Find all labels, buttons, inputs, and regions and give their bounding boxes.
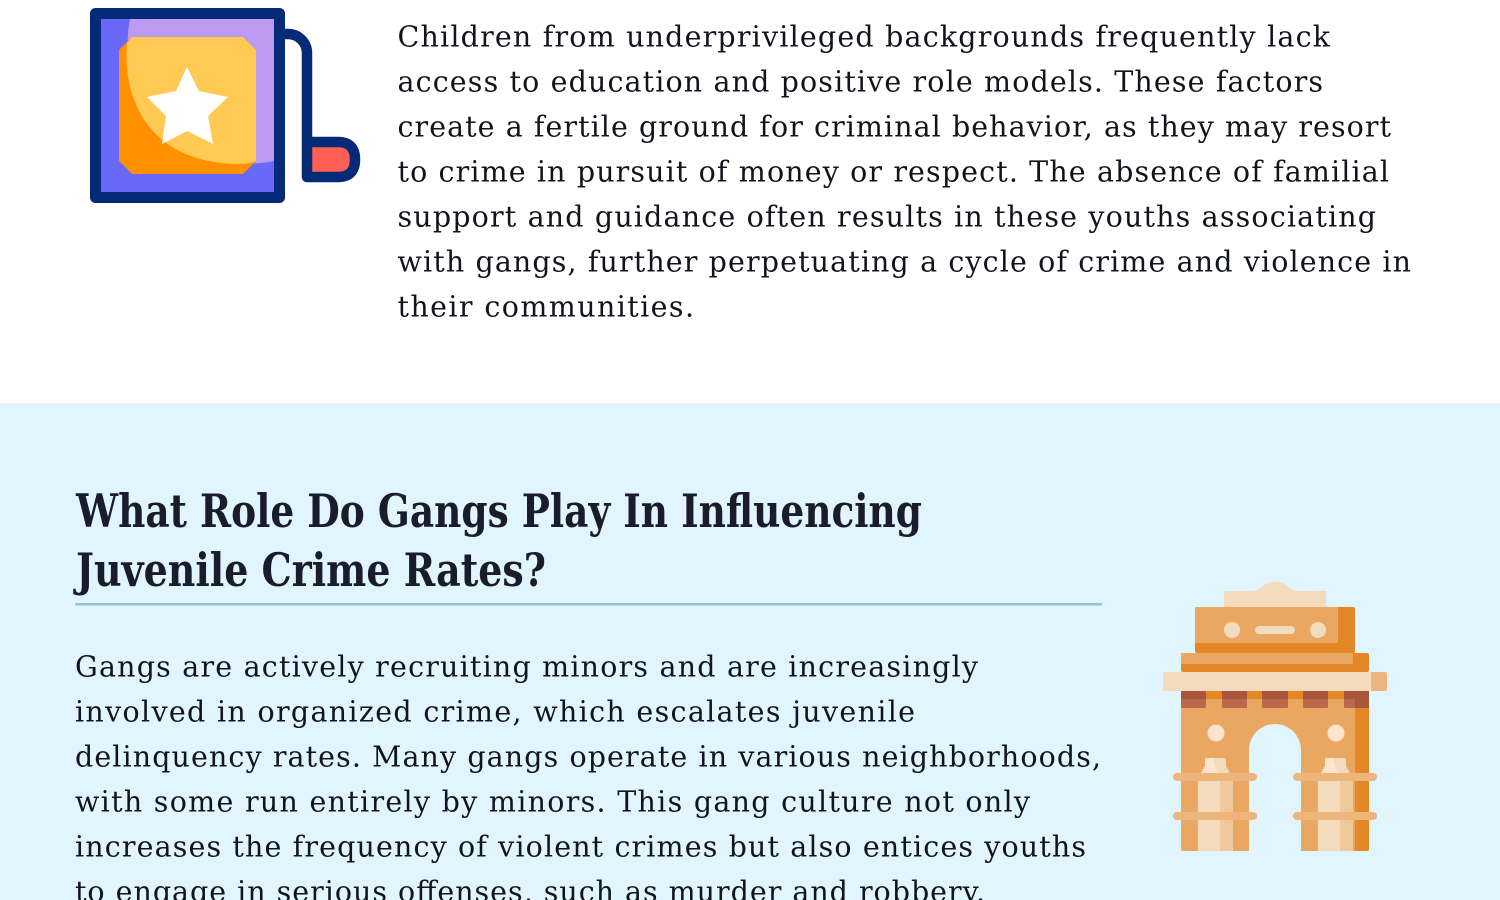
icon: India Gate monument bbox=[1163, 582, 1387, 851]
text block: underprivileged backgrounds paragraph: their communities. bbox=[398, 290, 694, 323]
panel: blue section background bbox=[0, 404, 1500, 900]
text block: gangs paragraph: delinquency rates. Many gangs operate in various neighborhoods, bbox=[75, 740, 1101, 773]
text block: underprivileged backgrounds paragraph: create a fertile ground for criminal behavior, as they may resort bbox=[398, 110, 1392, 143]
heading: gangs and juvenile crime rates: What Role Do Gangs Play In Influencing bbox=[75, 484, 922, 538]
text block: gangs paragraph: with some run entirely by minors. This gang culture not only bbox=[75, 785, 1031, 818]
text block: underprivileged backgrounds paragraph: with gangs, further perpetuating a cycle of crime and violence in bbox=[398, 245, 1411, 278]
text block: underprivileged backgrounds paragraph: to crime in pursuit of money or respect. The absence of familial bbox=[398, 155, 1389, 188]
text block: underprivileged backgrounds paragraph: access to education and positive role models. These factors bbox=[398, 65, 1323, 98]
heading: gangs and juvenile crime rates bbox=[73, 484, 922, 597]
text block: gangs paragraph: increases the frequency of violent crimes but also entices youths bbox=[75, 830, 1086, 863]
text block: underprivileged backgrounds paragraph bbox=[398, 20, 1411, 323]
text block: underprivileged backgrounds paragraph: support and guidance often results in these youths associating bbox=[398, 200, 1376, 233]
heading underline bbox=[75, 603, 1102, 606]
text block: gangs paragraph bbox=[75, 650, 1101, 900]
text block: gangs paragraph: Gangs are actively recruiting minors and are increasingly bbox=[75, 650, 979, 683]
text block: gangs paragraph: involved in organized crime, which escalates juvenile bbox=[75, 695, 915, 728]
icon: music box with star bbox=[96, 14, 355, 198]
heading: gangs and juvenile crime rates: Juvenile Crime Rates? bbox=[73, 543, 546, 597]
text block: underprivileged backgrounds paragraph: Children from underprivileged backgrounds frequently lack bbox=[398, 20, 1331, 53]
